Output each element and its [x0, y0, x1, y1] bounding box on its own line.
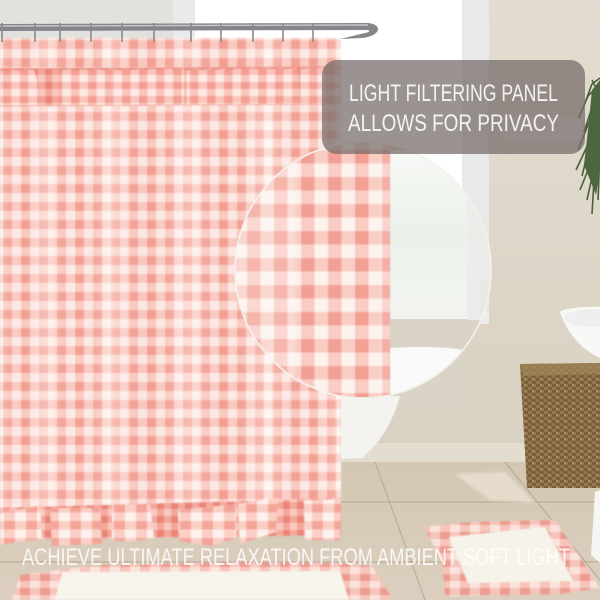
bottom ruffle: [0, 498, 341, 546]
wicker basket: [520, 363, 600, 488]
callout text: [348, 80, 559, 137]
top ruffle: [0, 67, 341, 107]
vessel sink: [560, 307, 600, 358]
rug: left: [12, 562, 390, 600]
curtain body: [0, 38, 341, 512]
callout panel: [322, 60, 585, 154]
towel stand: [591, 490, 600, 563]
bottle on sill: [479, 280, 489, 318]
magnifier circle: fabric detail: [230, 142, 491, 398]
floor tiles: [0, 462, 600, 600]
magnifier ring: [235, 142, 491, 398]
magnified curtain: [230, 142, 390, 398]
window: [195, 0, 489, 410]
tub in lens: [390, 347, 462, 398]
baseboard: [341, 443, 600, 462]
bathtub: [341, 396, 400, 459]
shower curtain: [0, 38, 341, 546]
window view in lens: [390, 146, 480, 324]
shower rod and hooks: [0, 23, 378, 42]
rug: right: [424, 520, 600, 596]
wall shelf: [500, 118, 582, 140]
plant: [576, 78, 600, 214]
